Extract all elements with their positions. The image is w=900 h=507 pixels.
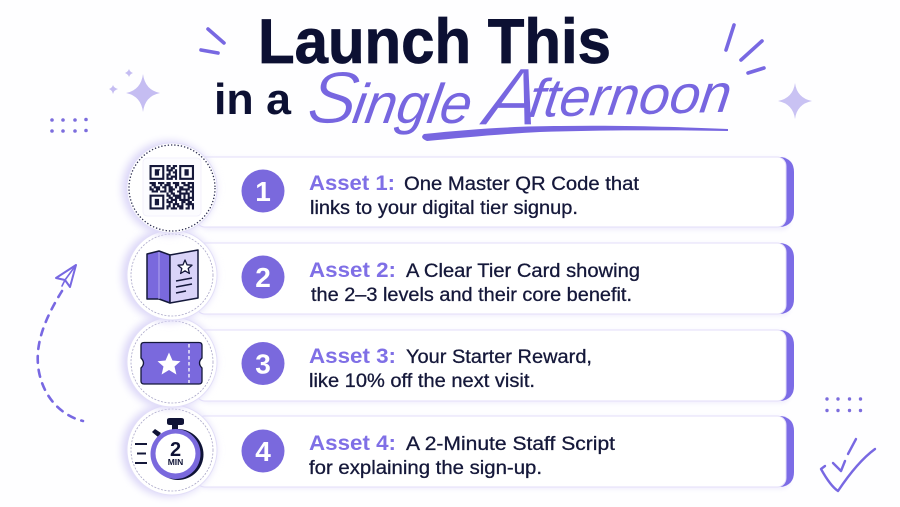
asset 4 text xyxy=(309,432,616,479)
brush underline xyxy=(422,126,728,141)
panel: asset 2 xyxy=(196,243,794,316)
asset 3 text xyxy=(309,345,592,392)
icon: paper plane with dashed arrow trail xyxy=(38,265,83,421)
icon badge 4: stopwatch xyxy=(122,403,217,497)
icon badge 4: stopwatch: MIN xyxy=(168,457,183,467)
asset 2 text: Asset 2: xyxy=(309,259,396,282)
asset 3 text: Your Starter Reward, xyxy=(406,346,592,368)
stopwatch lines xyxy=(135,444,147,463)
title line: Launch This: Launch This xyxy=(258,7,611,77)
panel: asset 3 xyxy=(196,330,794,403)
icon badge 4: stopwatch: 2 xyxy=(170,439,181,461)
title words: in a: in a xyxy=(214,75,292,124)
asset 4 text: for explaining the sign-up. xyxy=(309,457,542,479)
sparkles top left xyxy=(109,69,160,112)
asset 1 text: links to your digital tier signup. xyxy=(310,197,578,219)
script word: Afternoon xyxy=(474,51,739,143)
panel: asset 4 xyxy=(196,416,794,489)
icon badge 1: QR code xyxy=(122,141,217,235)
script word: Afternoon: A xyxy=(474,51,548,143)
asset 2 text: A Clear Tier Card showing xyxy=(406,260,640,282)
number badge 1 xyxy=(242,170,284,212)
card lines xyxy=(176,278,192,293)
number badge 2: 2 xyxy=(255,262,271,293)
icon: hand-drawn check mark xyxy=(821,439,875,491)
asset 4 text: Asset 4: xyxy=(309,432,396,455)
asset 1 text: One Master QR Code that xyxy=(404,173,640,195)
icon badge 2: folded tier card xyxy=(122,228,217,322)
card panels xyxy=(147,251,170,303)
title xyxy=(214,7,739,143)
number badge 4: 4 xyxy=(255,436,271,467)
accent strokes right of title xyxy=(726,25,764,73)
script word: Single xyxy=(302,56,480,139)
stopwatch crown xyxy=(167,418,184,431)
panel: asset 1 xyxy=(196,157,794,230)
asset 3 text: Asset 3: xyxy=(309,345,396,368)
ticket star xyxy=(158,352,180,374)
dot grid left xyxy=(50,118,88,133)
asset 1 text xyxy=(309,172,640,219)
ticket shape xyxy=(141,342,202,384)
script word: Single: S xyxy=(302,56,365,139)
icon badge 3: ticket xyxy=(122,315,217,409)
asset 2 text: the 2–3 levels and their core benefit. xyxy=(311,284,632,306)
asset 3 text: like 10% off the next visit. xyxy=(309,370,535,392)
dot grid right xyxy=(825,397,862,412)
card star xyxy=(178,260,192,274)
number badge 1: 1 xyxy=(255,176,271,207)
number badge 4 xyxy=(242,430,284,472)
number badge 3 xyxy=(242,342,284,385)
asset 1 text: Asset 1: xyxy=(309,172,395,195)
sparkle right xyxy=(778,83,812,119)
number badge 3: 3 xyxy=(255,348,271,380)
accent strokes left of title xyxy=(201,29,224,53)
asset 2 text xyxy=(309,259,640,306)
QR pattern xyxy=(150,166,194,208)
asset 4 text: A 2-Minute Staff Script xyxy=(406,433,616,455)
number badge 2 xyxy=(242,256,284,298)
stopwatch body xyxy=(152,429,204,480)
script word: Afternoon: fternoon xyxy=(526,63,735,129)
script word: Single: ingle xyxy=(349,72,477,135)
